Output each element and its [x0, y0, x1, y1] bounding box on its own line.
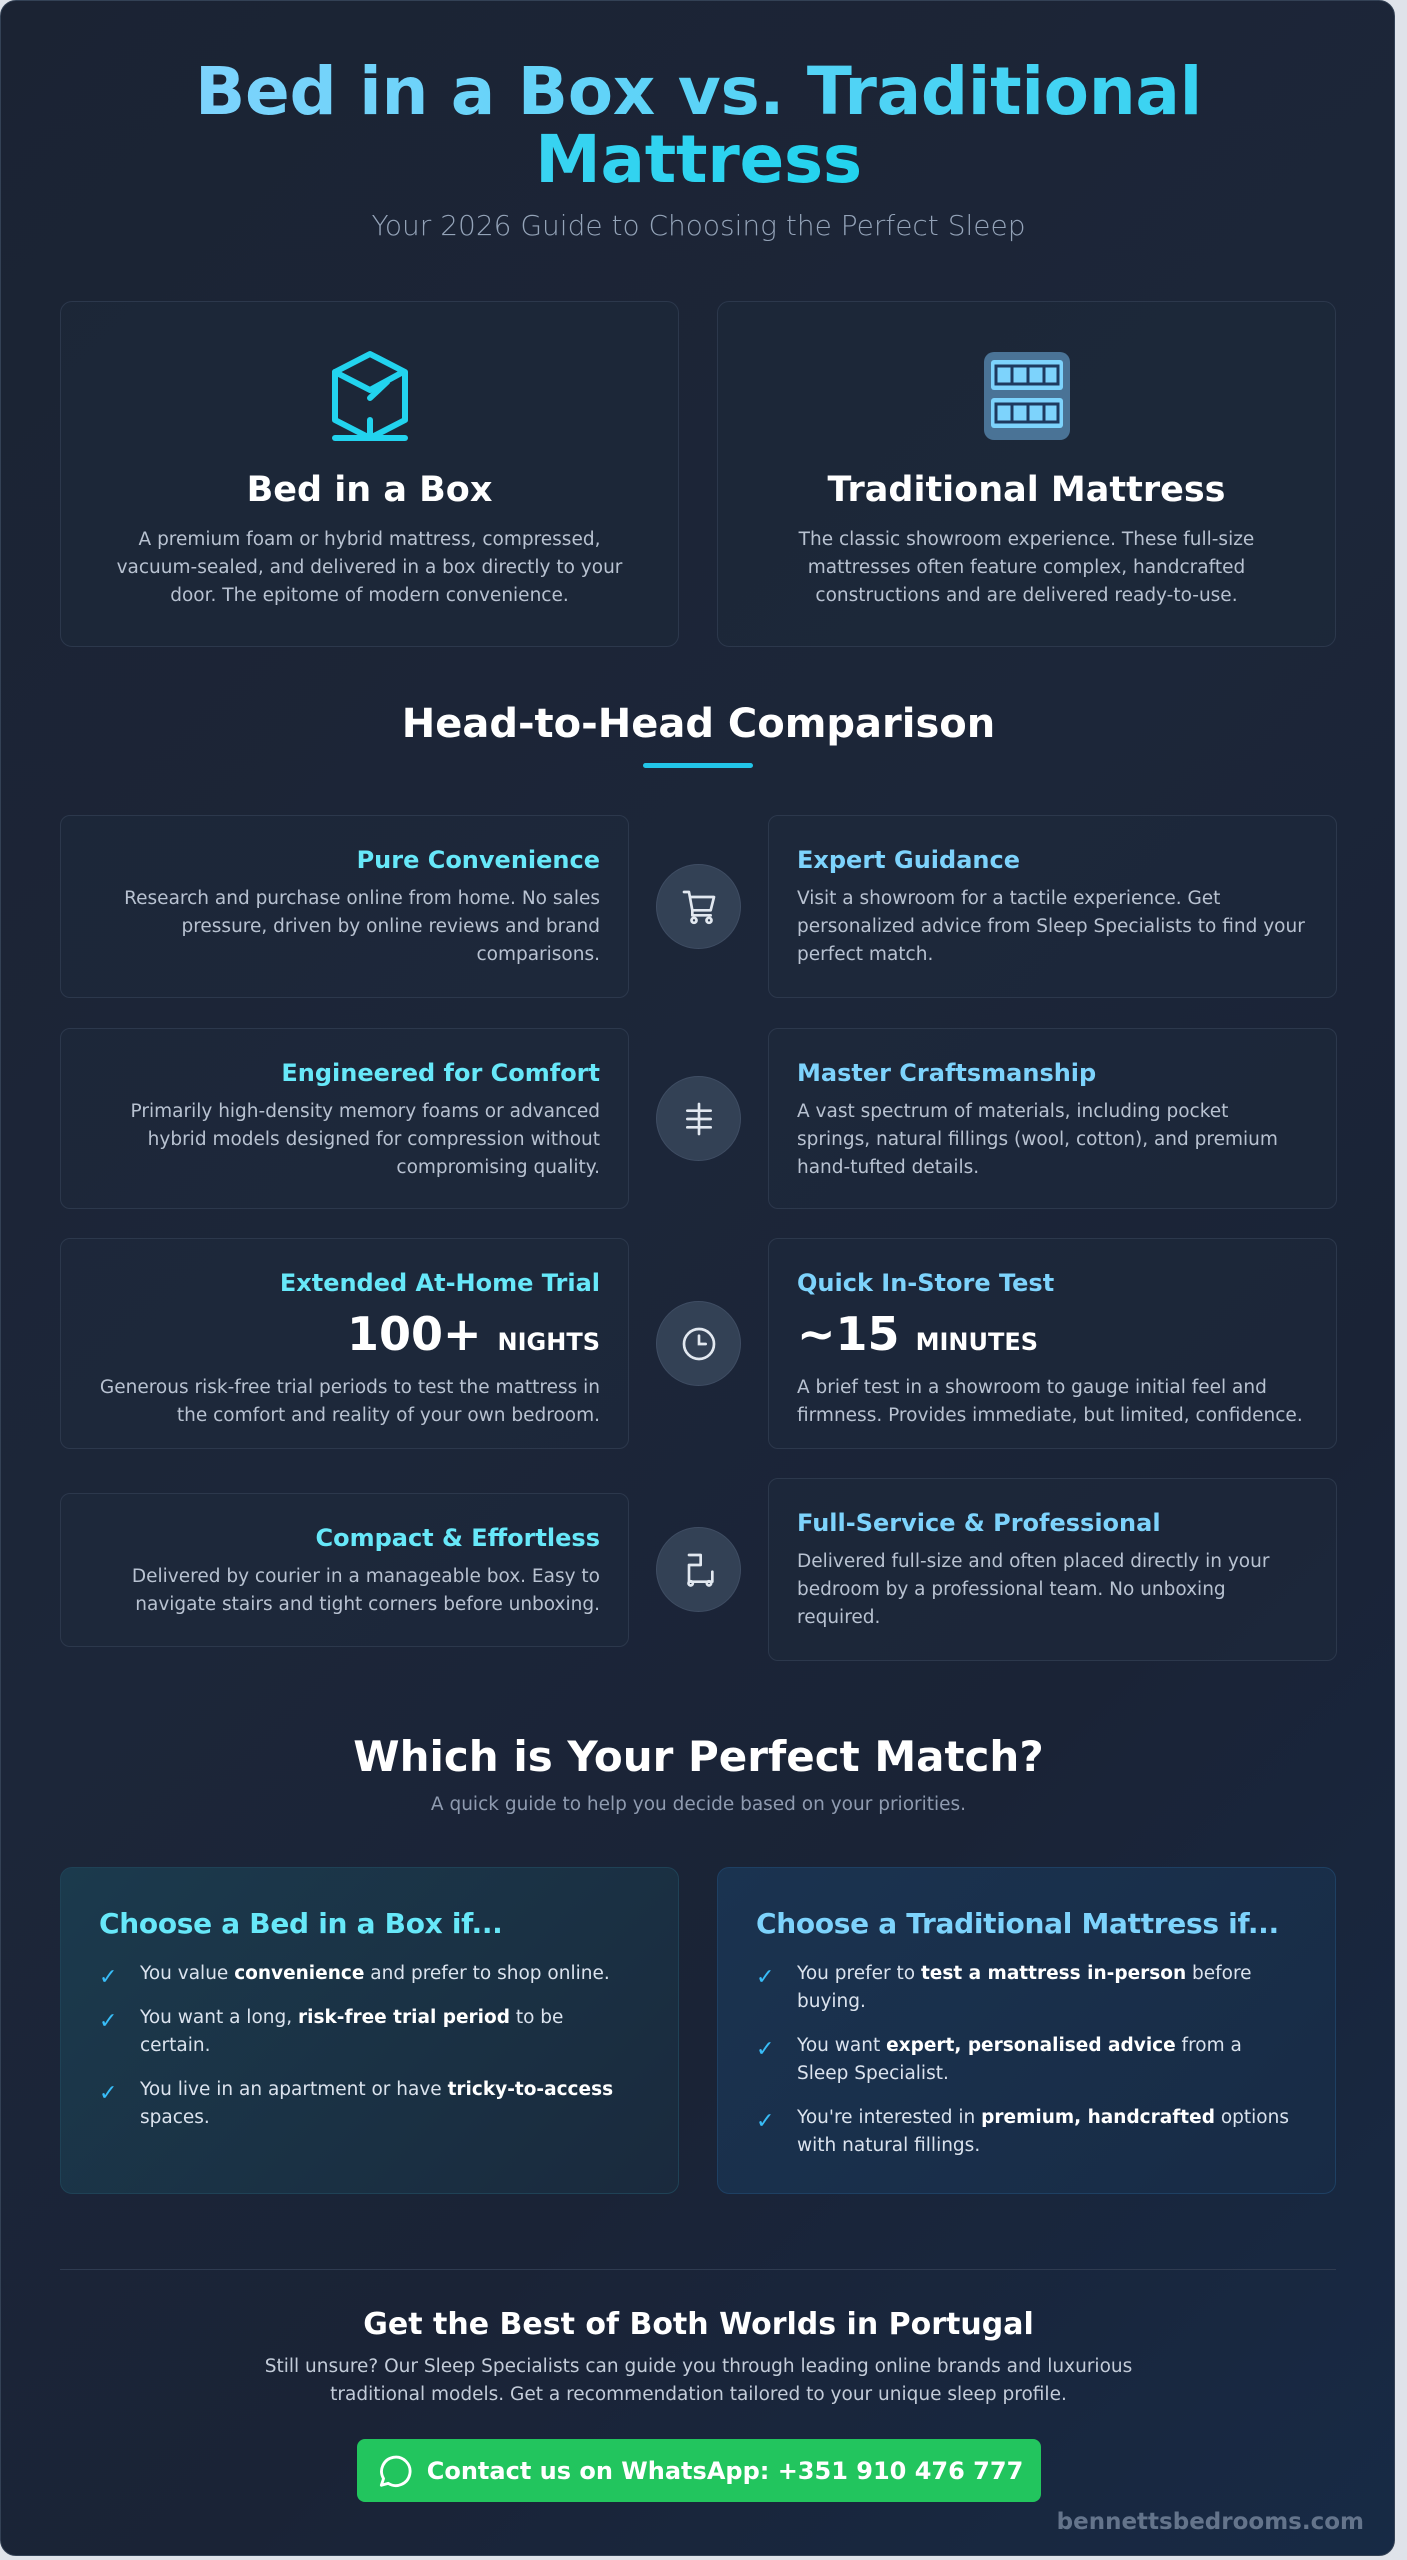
heading: Bed in a Box [247, 470, 492, 510]
row3 left card: Generous risk-free trial periods to test the mattress in the comfort and reality of your own bedroom. [100, 1377, 600, 1426]
heading: Traditional Mattress [827, 470, 1226, 510]
panel: choose traditional: Sleep Specialist. [797, 2063, 949, 2084]
row2 right card: Master Craftsmanship [797, 1059, 1096, 1087]
row4 left card: Compact & Effortless [315, 1524, 600, 1552]
heading: head-to-head: Head-to-Head Comparison [402, 701, 995, 747]
panel: bed in a box intro [60, 301, 679, 647]
panel: choose bed in a box: certain. [140, 2035, 210, 2056]
panel: choose traditional: buying. [797, 1991, 866, 2012]
panel: choose traditional: You want expert, personalised advice from a [797, 2035, 1242, 2056]
panel: traditional intro [717, 301, 1336, 647]
description: A premium foam or hybrid mattress, compressed, vacuum-sealed, and delivered in a box directly to your door. The epitome of modern convenience. [117, 529, 622, 606]
row4 left card [60, 1493, 629, 1647]
row2 right card: A vast spectrum of materials, including pocket [797, 1101, 1228, 1122]
subtitle: Your 2026 Guide to Choosing the Perfect Sleep [372, 209, 1025, 242]
description: The classic showroom experience. These full-size mattresses often feature complex, handcrafted constructions and are delivered ready-to-use. [799, 529, 1254, 606]
icon: cart [656, 864, 741, 949]
heading: perfect match: Which is Your Perfect Match? [353, 1732, 1044, 1781]
panel: choose bed in a box: You value convenience and prefer to shop online. [140, 1963, 610, 1984]
panel: choose traditional: Choose a Traditional Mattress if... [756, 1907, 1279, 1940]
row1 right card: Visit a showroom for a tactile experience. Get personalized advice from Sleep Specialists to find your perfect match. [797, 888, 1305, 965]
panel: choose bed in a box [60, 1867, 679, 2194]
panel: choose bed in a box: Choose a Bed in a Box if... [99, 1907, 502, 1940]
row2 right card [768, 1028, 1337, 1209]
text: cta description: Still unsure? Our Sleep Specialists can guide you through leading online brands and luxurious [265, 2356, 1132, 2377]
row3 right card: A brief test in a showroom to gauge initial feel and firmness. Provides immediate, but limited, confidence. [797, 1377, 1303, 1426]
row1 left card: Research and purchase online from home. No sales pressure, driven by online reviews and brand comparisons. [124, 888, 600, 965]
icon: trolley [656, 1527, 741, 1612]
row3 right card [768, 1238, 1337, 1449]
panel: choose traditional: with natural fillings. [797, 2135, 980, 2156]
row2 left card: Primarily high-density memory foams or advanced hybrid models designed for compression without compromising quality. [131, 1101, 600, 1178]
row4 right card: Delivered full-size and often placed directly in your bedroom by a professional team. No unboxing required. [797, 1551, 1269, 1628]
row1 right card: Expert Guidance [797, 846, 1020, 874]
icon: whatsapp [380, 2456, 412, 2488]
panel: choose bed in a box: You live in an apartment or have tricky-to-access [140, 2079, 613, 2100]
button: whatsapp [357, 2439, 1041, 2502]
row1 right card [768, 815, 1337, 998]
row1 left card: Pure Convenience [357, 846, 600, 874]
row1 left card [60, 815, 629, 998]
row4 right card [768, 1478, 1337, 1661]
row2 right card: springs, natural fillings (wool, cotton), and premium hand-tufted details. [797, 1129, 1278, 1178]
text: cta description: traditional models. Get a recommendation tailored to your unique sleep profile. [330, 2384, 1067, 2405]
row2 left card [60, 1028, 629, 1209]
heading: best of both: Get the Best of Both Worlds in Portugal [363, 2307, 1034, 2342]
icon: mattress [984, 352, 1070, 440]
panel: choose traditional: You're interested in premium, handcrafted options [797, 2107, 1289, 2128]
icon: clock [656, 1301, 741, 1386]
row3 left card: Extended At-Home Trial [280, 1269, 600, 1297]
icon: layers [656, 1076, 741, 1161]
title [195, 53, 1202, 198]
button: whatsapp: Contact us on WhatsApp: +351 910 476 777 [427, 2456, 1023, 2484]
row3 left card: 100+ NIGHTS [347, 1307, 600, 1361]
row4 left card: Delivered by courier in a manageable box. Easy to navigate stairs and tight corners before unboxing. [132, 1566, 600, 1615]
panel: choose traditional: You prefer to test a mattress in-person before [797, 1963, 1252, 1984]
panel: choose traditional [717, 1867, 1336, 2194]
panel: choose bed in a box: You want a long, risk-free trial period to be [140, 2007, 563, 2028]
text: cta description [265, 2356, 1132, 2405]
row3 right card: ~15 MINUTES [797, 1307, 1038, 1361]
footer: website: bennettsbedrooms.com [1057, 2509, 1364, 2535]
row2 left card: Engineered for Comfort [281, 1059, 600, 1087]
panel: choose bed in a box: spaces. [140, 2107, 210, 2128]
title: Bed in a Box vs. Traditional [195, 53, 1202, 130]
row3 left card [60, 1238, 629, 1449]
row3 right card: Quick In-Store Test [797, 1269, 1054, 1297]
icon: box [332, 351, 408, 441]
subheading: A quick guide to help you decide based on your priorities. [431, 1794, 966, 1815]
title: Mattress [535, 121, 862, 198]
row4 right card: Full-Service & Professional [797, 1509, 1161, 1537]
